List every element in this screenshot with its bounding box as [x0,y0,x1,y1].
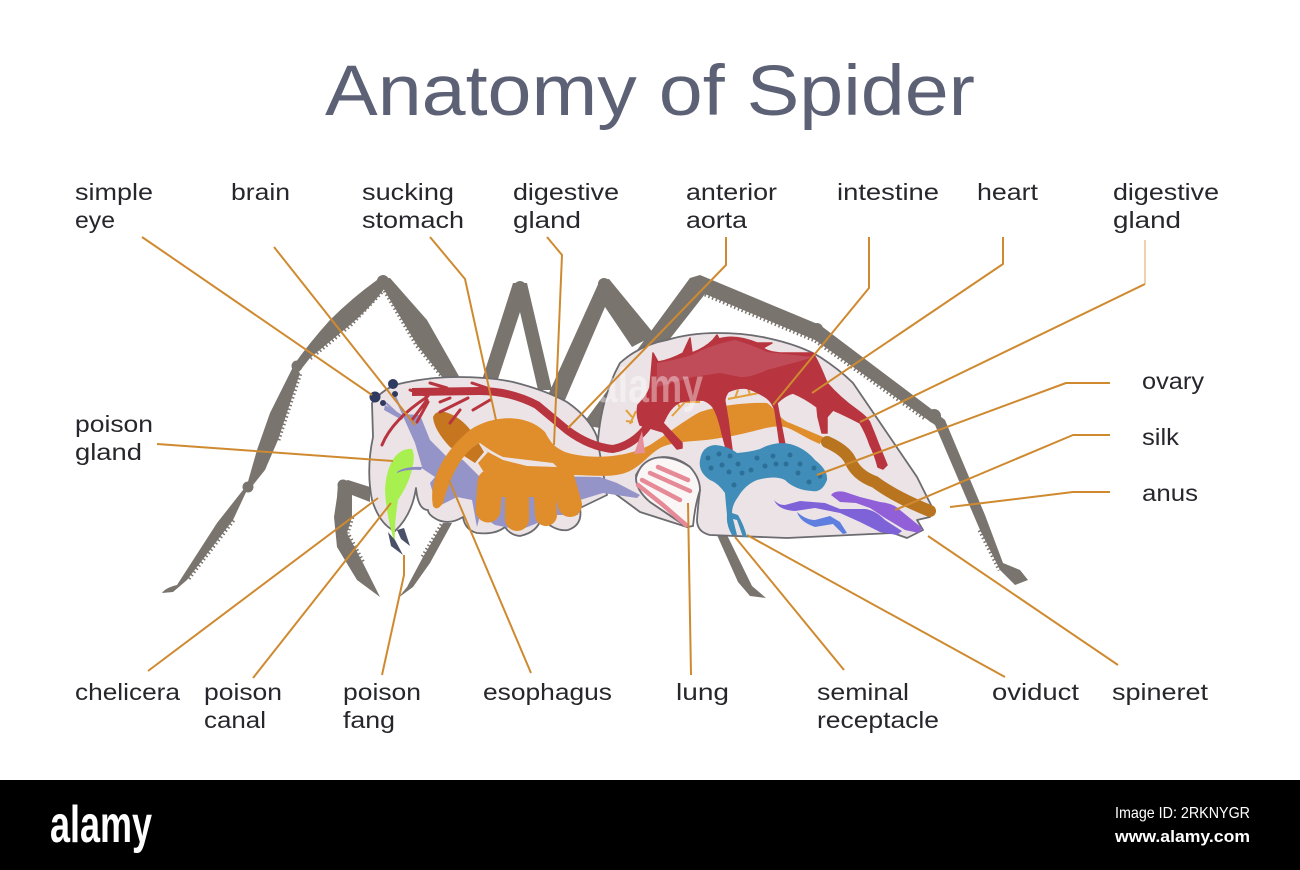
footer bar [0,780,1300,870]
brain arteries [382,383,490,445]
label: digestive gland [513,179,619,445]
poison canal [397,467,422,473]
lung [634,431,700,527]
label: ovary [817,368,1204,475]
label: digestive gland right [860,179,1219,422]
label: lung [676,503,729,705]
label: poison canal [204,503,391,733]
gland gap [480,443,557,467]
label: intestine: intestine [837,179,939,205]
label: digestive gland right: gland [1113,207,1181,233]
label: anterior aorta: anterior [686,179,777,205]
label: chelicera: chelicera [75,679,181,705]
label: silk [895,424,1179,510]
heart highlight [657,340,812,387]
label: silk: silk [1142,424,1179,450]
label: digestive gland: gland [513,207,581,233]
gland branches [626,388,764,424]
label: heart [812,179,1039,393]
footer logo: alamy [50,796,152,854]
label: oviduct: oviduct [992,679,1080,705]
label: oviduct [747,535,1080,705]
label: anterior aorta [568,179,777,428]
heart [637,335,887,469]
silk glands [774,491,922,535]
label: poison canal: canal [204,707,266,733]
label: brain: brain [231,179,290,205]
label: digestive gland: digestive [513,179,619,205]
legs [162,275,1028,598]
label: spineret [928,536,1209,705]
lavender nervous tissue [384,405,640,530]
intestine rear [827,442,930,511]
pink tube [634,431,645,454]
label: brain [231,179,415,425]
title: Anatomy of Spider [325,52,975,131]
poison gland [385,449,414,544]
label: sucking stomach: sucking [362,179,454,205]
label: esophagus: esophagus [483,679,612,705]
label: simple eye [75,179,372,395]
label: esophagus [449,480,612,705]
label: poison fang: poison [343,679,421,705]
leg hairs [187,287,1000,580]
ovary [700,443,827,537]
simple eyes [370,379,404,418]
label: seminal receptacle [735,537,939,733]
label: poison gland: gland [75,439,142,465]
label: poison canal: poison [204,679,282,705]
digestive system [432,403,823,519]
label: chelicera [75,498,378,705]
label: poison gland: poison [75,411,153,437]
lung stripes [638,467,690,525]
label: poison fang [343,555,421,733]
label: heart: heart [977,179,1039,205]
label: anus: anus [1142,480,1198,506]
label: digestive gland right: digestive [1113,179,1219,205]
watermark: alamy [597,360,703,413]
label: simple eye: eye [75,207,115,233]
label: seminal receptacle: seminal [817,679,909,705]
cephalothorax [369,377,607,536]
spider illustration [162,275,1028,598]
label: seminal receptacle: receptacle [817,707,939,733]
anterior aorta [412,391,650,449]
label: sucking stomach [362,179,496,420]
website: www.alamy.com [1114,827,1250,846]
label: lung: lung [676,679,729,705]
digestive gland lobes [488,480,570,519]
label: simple eye: simple [75,179,153,205]
label: anterior aorta: aorta [686,207,748,233]
image id: Image ID: 2RKNYGR [1115,805,1250,822]
sucking stomach [433,412,484,463]
ovary dots [706,452,822,488]
poison fangs [388,528,410,555]
abdomen [598,333,932,538]
label: ovary: ovary [1142,368,1204,394]
label: intestine [773,179,939,405]
label: sucking stomach: stomach [362,207,464,233]
label: spineret: spineret [1112,679,1209,705]
label: poison fang: fang [343,707,395,733]
label: anus [950,480,1198,507]
label: poison gland [75,411,393,465]
